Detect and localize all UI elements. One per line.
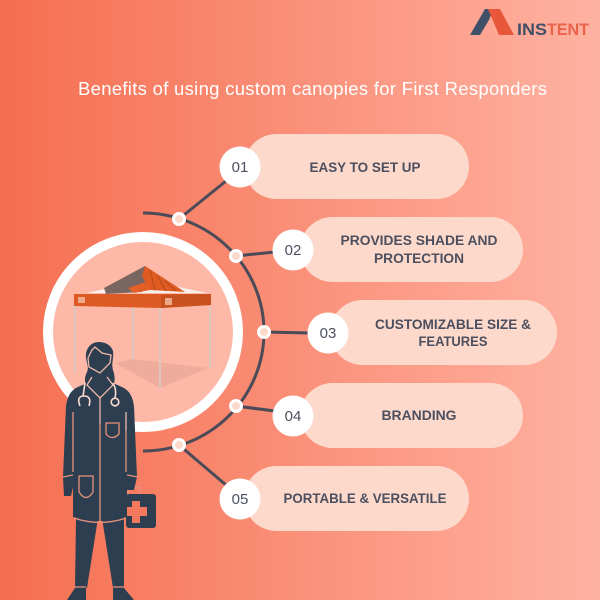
- benefit 3: customizable size and features: FEATURES: [418, 334, 488, 349]
- stethoscope: [79, 383, 119, 406]
- logo: Instent: INS: [517, 21, 547, 39]
- benefit 3: customizable size and features: 03: [320, 325, 336, 342]
- connector arc and branches: [143, 181, 310, 485]
- canopy photo circle: [48, 237, 238, 427]
- collar, face and upper coat lines: [87, 347, 126, 431]
- benefit 3: customizable size and features: [308, 300, 557, 365]
- benefit 1: easy to set up: 01: [232, 159, 248, 176]
- title: Benefits of using custom canopies for First Responders: [78, 78, 547, 99]
- medical kit: [126, 487, 156, 528]
- logo: Instent: TENT: [547, 21, 589, 39]
- benefit 3: customizable size and features: CUSTOMIZABLE SIZE &: [375, 317, 531, 332]
- canopy valance: [74, 294, 211, 308]
- benefit 5: portable and versatile: 05: [232, 491, 248, 508]
- benefit 1: easy to set up: EASY TO SET UP: [310, 160, 420, 175]
- legs: [75, 518, 98, 588]
- doctor figure: [63, 342, 138, 600]
- benefit 5: portable and versatile: [220, 466, 469, 531]
- benefit 2: provides shade and protection: PROTECTION: [374, 251, 464, 266]
- benefit 4: branding: BRANDING: [382, 408, 456, 423]
- benefit 2: provides shade and protection: PROVIDES SHADE AND: [340, 233, 498, 248]
- coat: [63, 383, 137, 521]
- logo: Instent: [470, 9, 589, 39]
- hair: [85, 342, 115, 387]
- benefit 5: portable and versatile: PORTABLE & VERSATILE: [284, 491, 446, 506]
- benefit 4: branding: [272, 383, 523, 448]
- hands: [63, 477, 73, 496]
- ground shadow: [115, 359, 208, 388]
- coat details: [63, 412, 138, 587]
- canopy roof: [87, 280, 207, 293]
- benefit 2: provides shade and protection: 02: [285, 242, 301, 259]
- canopy legs: [75, 306, 210, 389]
- benefit 2: provides shade and protection: [272, 217, 523, 282]
- benefit 4: branding: 04: [285, 408, 301, 425]
- connector nodes: [174, 214, 270, 450]
- benefit 1: easy to set up: [220, 134, 469, 199]
